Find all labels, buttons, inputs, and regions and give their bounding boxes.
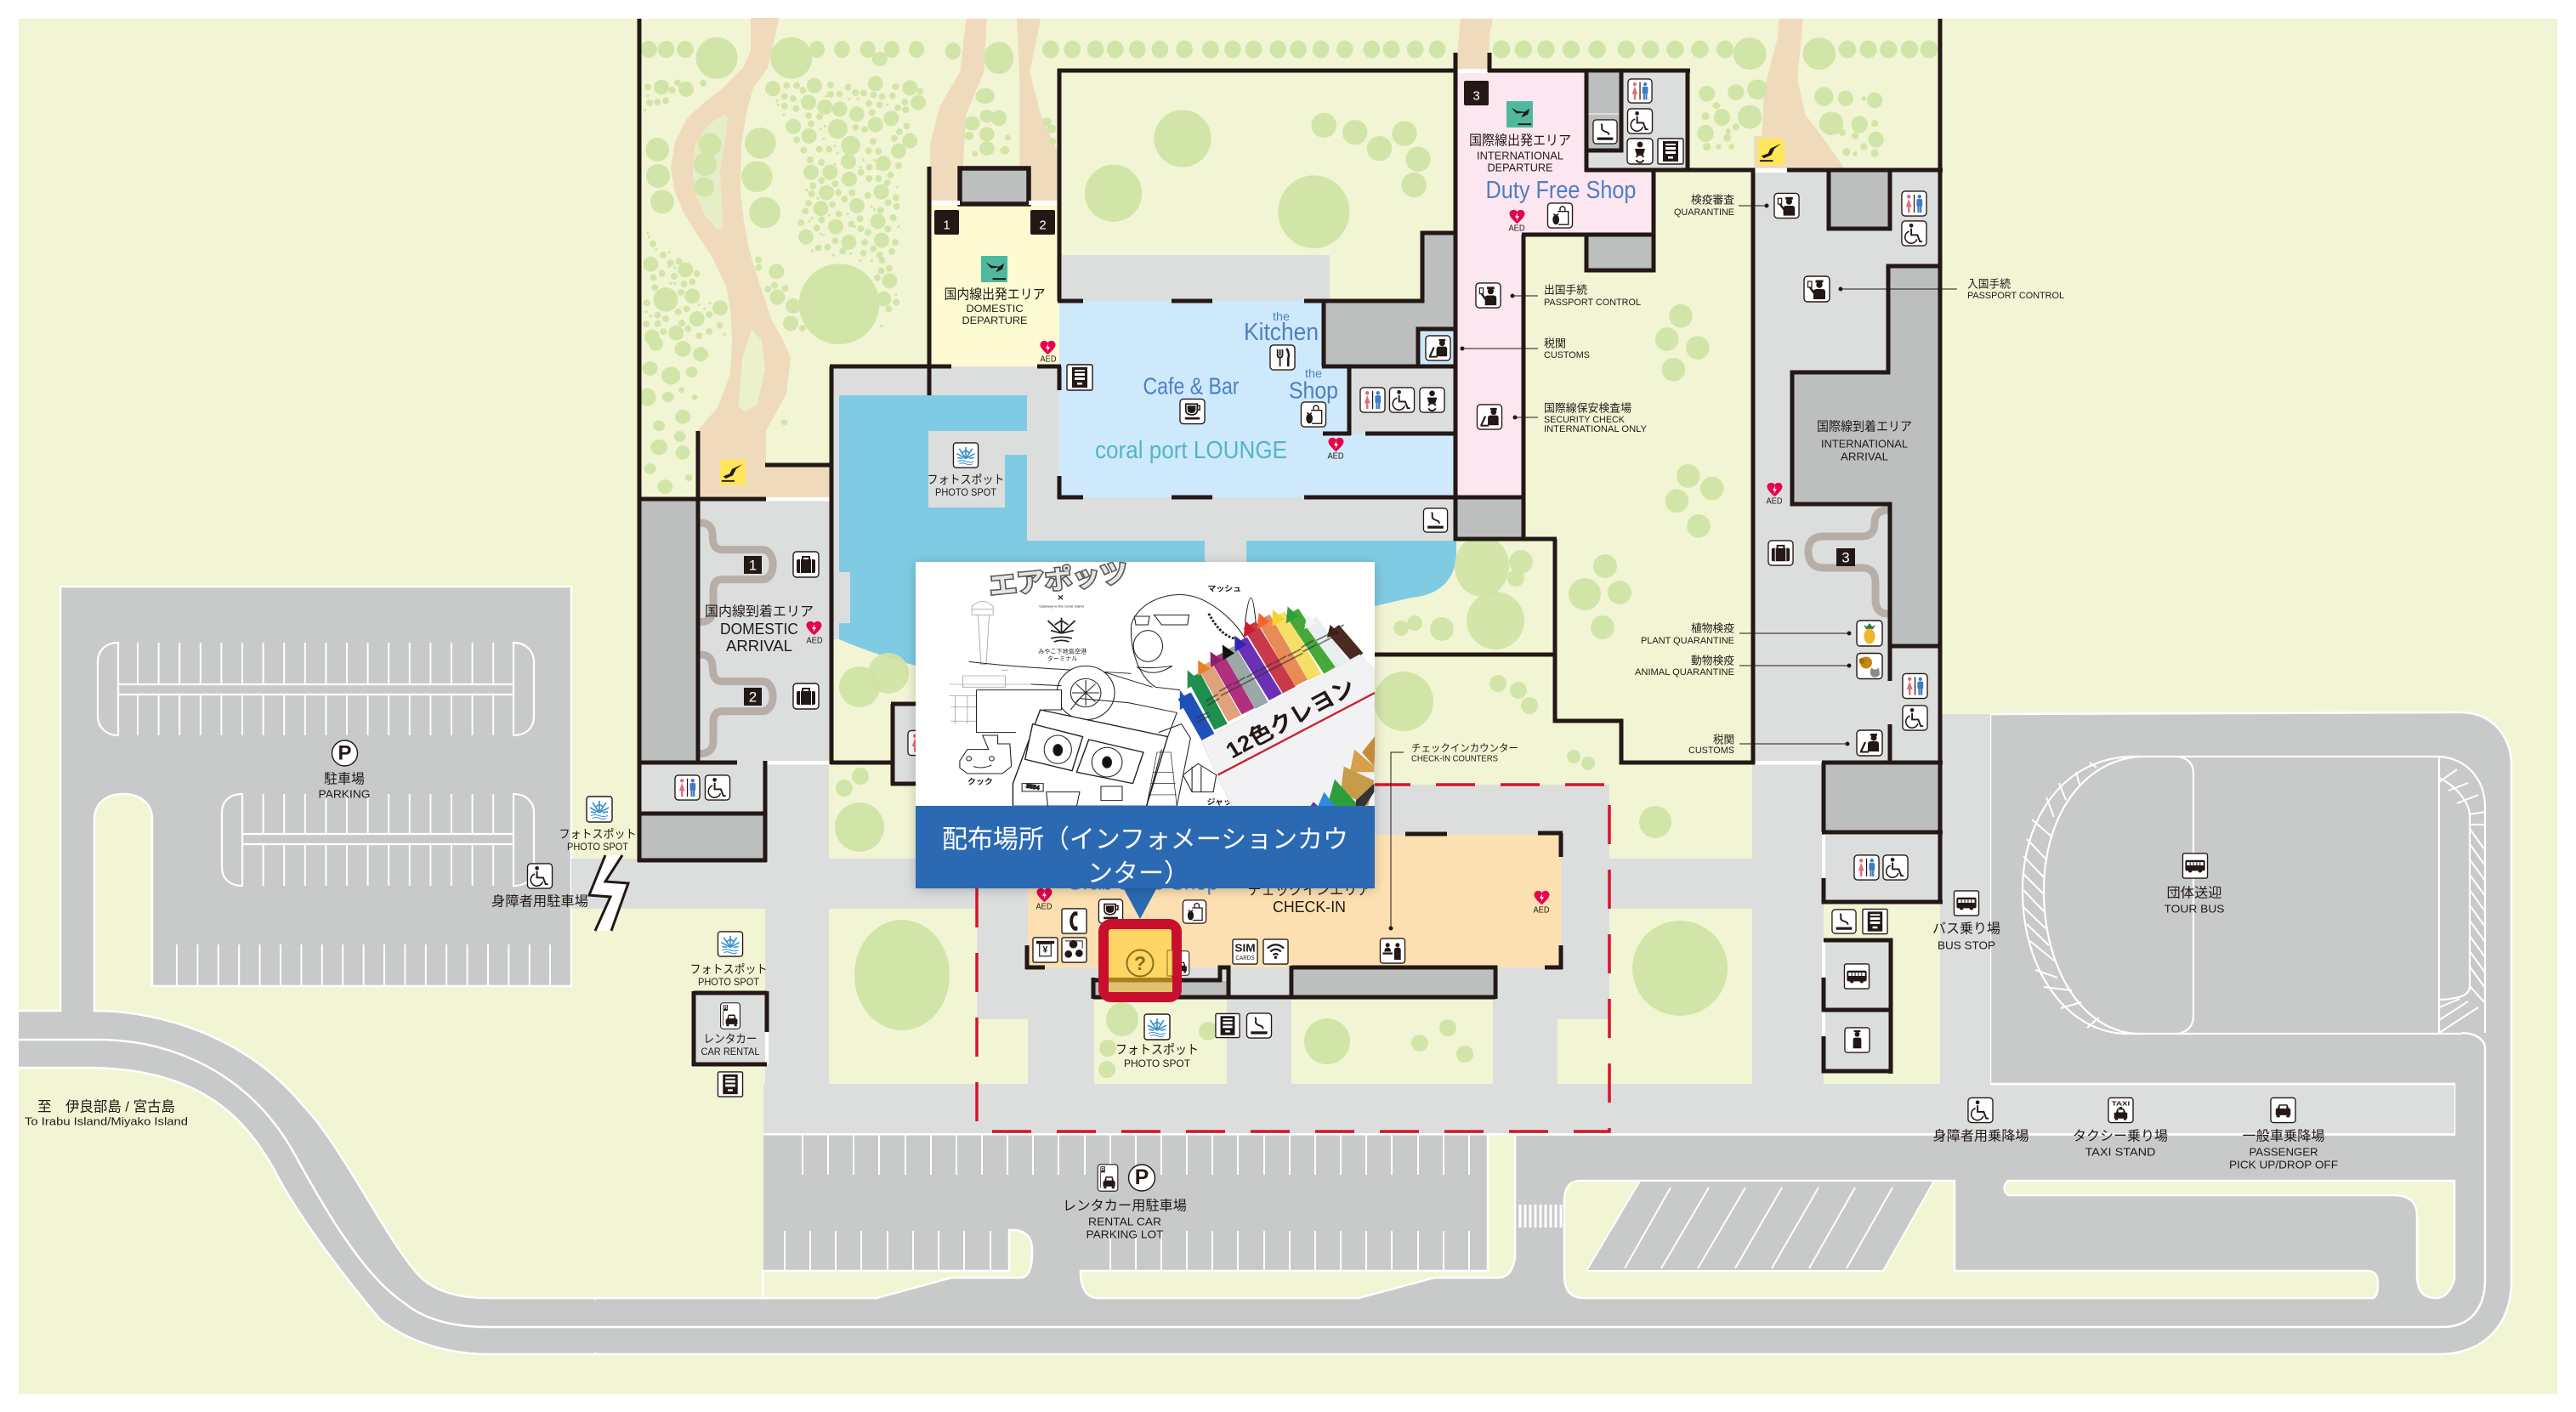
text: taxi stand: TAXI STAND	[2085, 1146, 2156, 1158]
panel: north-east facilities room	[1586, 71, 1688, 269]
text: tour bus	[2165, 886, 2225, 915]
text: security check: 国際線保安検査場	[1544, 401, 1631, 415]
text: to Irabu and Miyako	[25, 1098, 188, 1127]
group: AED markers: AED	[806, 636, 823, 646]
walkways	[571, 714, 2454, 1136]
text: bus stop	[1932, 921, 2000, 952]
text: south-west photo spot	[690, 962, 767, 988]
panel: north courtyard	[1059, 71, 1455, 301]
forecourt trees	[835, 554, 1728, 1078]
text: international arrival	[1817, 420, 1912, 462]
text: accessible drop off: 身障者用乗降場	[1933, 1129, 2028, 1144]
text: rental car parking lot: レンタカー用駐車場	[1063, 1199, 1187, 1214]
text: domestic departure: DEPARTURE	[962, 315, 1027, 326]
text: departure customs	[1544, 337, 1590, 360]
text: domestic arrival: 国内線到着エリア	[705, 604, 814, 619]
text: forecourt photo spot	[1115, 1042, 1199, 1069]
text: domestic departure	[944, 287, 1046, 326]
group: AED markers	[806, 210, 1782, 915]
panel: check-in hall	[1028, 835, 1561, 997]
text: tour bus: TOUR BUS	[2165, 903, 2225, 915]
text: domestic arrival	[705, 604, 814, 655]
green islands between roads	[763, 1134, 2454, 1298]
text: south-west photo spot: PHOTO SPOT	[698, 976, 760, 988]
callout image: colouring sheet and crayons: クック	[967, 778, 993, 786]
group: check-in hall icons	[1033, 899, 1405, 1040]
gate markers: 2	[1039, 218, 1047, 233]
text: coral port LOUNGE: coral port LOUNGE	[1095, 437, 1287, 464]
rental car parking bays	[763, 1134, 1488, 1298]
text: tour bus: 団体送迎	[2166, 886, 2222, 901]
text: car rental: レンタカー	[704, 1032, 757, 1046]
garden plots around terminal	[977, 1000, 1609, 1084]
group: AED markers: AED	[1508, 224, 1525, 233]
highlight: information counter	[1104, 924, 1177, 997]
text: accessible parking: 身障者用駐車場	[491, 894, 588, 910]
text: animal quarantine: 動物検疫	[1691, 655, 1734, 666]
text: Cafe and Bar: Cafe & Bar	[1143, 372, 1240, 400]
text: departure customs: CUSTOMS	[1544, 350, 1590, 360]
text: the Kitchen	[1244, 309, 1319, 346]
text: animal quarantine: ANIMAL QUARANTINE	[1635, 667, 1734, 678]
panel: small restroom block	[893, 704, 961, 784]
text: Duty Free Shop: Duty Free Shop	[1486, 177, 1636, 204]
text: departure passport control: PASSPORT CONTROL	[1544, 298, 1641, 308]
text: check-in counters: CHECK-IN COUNTERS	[1411, 755, 1498, 763]
text: parking: PARKING	[318, 787, 371, 801]
text: parking	[318, 772, 371, 801]
trees: upper west forest	[645, 82, 920, 344]
gate markers: 1	[943, 218, 950, 233]
text: to Irabu and Miyako: To Irabu Island/Miyako Island	[25, 1115, 188, 1127]
text: departure customs: 税関	[1544, 337, 1566, 350]
access road	[0, 1003, 850, 1354]
callout image: colouring sheet and crayons	[916, 558, 1376, 808]
text: international departure	[1469, 133, 1571, 173]
panel: dark service blocks	[639, 233, 1523, 860]
text: bus stop: BUS STOP	[1938, 938, 1995, 952]
group: AED markers: AED	[1041, 355, 1056, 364]
baggage carousel markers: 3	[1841, 549, 1850, 566]
text: pond photo spot	[927, 473, 1005, 498]
text: passenger pick up: PASSENGER	[2250, 1146, 2318, 1158]
overlapping trees at pond edge	[868, 536, 1533, 694]
panel: international departure area	[1456, 73, 1654, 497]
trees: top row and lower west forest	[638, 37, 1555, 494]
text: passenger pick up: PICK UP/DROP OFF	[2229, 1158, 2338, 1171]
text: check-in counters	[1411, 742, 1518, 763]
text: security check	[1544, 401, 1648, 434]
tan footpaths west	[672, 19, 1058, 497]
text: car rental	[701, 1032, 760, 1058]
text: arrival customs	[1688, 733, 1734, 756]
gate markers: 3	[1472, 88, 1480, 104]
panel: domestic arrival area	[639, 499, 831, 814]
panel: east building blocks	[1824, 763, 1940, 1071]
text: forecourt photo spot: フォトスポット	[1115, 1042, 1199, 1058]
callout image: colouring sheet and crayons: 12色クレヨン	[1222, 674, 1360, 763]
text: international arrival: INTERNATIONAL	[1821, 437, 1908, 451]
text: arrival customs: CUSTOMS	[1688, 746, 1734, 756]
text: bus stop: バス乗り場	[1932, 921, 2000, 937]
text: to Irabu and Miyako: 至 伊良部島 / 宮古島	[37, 1098, 175, 1115]
tan footpath east	[1456, 19, 1844, 168]
panel: international arrival area	[1753, 170, 1940, 763]
text: check-in area: CHECK-IN	[1273, 899, 1346, 916]
text: quarantine: QUARANTINE	[1674, 207, 1734, 218]
callout image: colouring sheet and crayons: Gateway to the Coral Island	[1039, 604, 1085, 608]
white door openings	[765, 69, 1825, 1064]
text: the Shop: the	[1305, 366, 1322, 380]
trees: east gardens	[1493, 37, 1938, 538]
road centre line	[19, 1033, 2485, 1327]
text: check-in counters: チェックインカウンター	[1411, 742, 1518, 754]
text: plant quarantine: PLANT QUARANTINE	[1641, 636, 1734, 646]
text: arrival passport control	[1967, 277, 2064, 301]
icon: international arrival sign	[1758, 139, 1784, 165]
text: plant quarantine	[1641, 622, 1734, 646]
text: quarantine	[1674, 194, 1734, 218]
text: domestic departure: DOMESTIC	[966, 303, 1024, 315]
text: parking: 駐車場	[324, 772, 365, 787]
text: check-in area: チェックインエリア	[1248, 882, 1370, 898]
text: west photo spot: フォトスポット	[559, 827, 636, 841]
text: international departure: 国際線出発エリア	[1469, 133, 1571, 148]
callout image: colouring sheet and crayons: ×	[1058, 593, 1064, 604]
text: the Shop	[1289, 366, 1338, 403]
text: departure passport control: 出国手続	[1544, 284, 1587, 296]
text: domestic arrival: ARRIVAL	[726, 638, 792, 655]
text: international departure: DEPARTURE	[1488, 162, 1553, 173]
icon: domestic departure sign	[981, 256, 1007, 282]
panel: car rental office	[694, 993, 767, 1064]
text: arrival passport control: PASSPORT CONTROL	[1967, 291, 2064, 301]
text: animal quarantine	[1635, 655, 1734, 678]
text: pond photo spot: フォトスポット	[927, 473, 1005, 486]
text: arrival passport control: 入国手続	[1967, 277, 2011, 291]
callout image: colouring sheet and crayons: 3554	[1025, 784, 1040, 791]
callout pointer	[1123, 887, 1157, 919]
text: passenger pick up	[2229, 1129, 2338, 1171]
baggage carousel markers: 1	[749, 558, 757, 573]
group: AED markers: AED	[1036, 903, 1053, 911]
text: the Kitchen: Kitchen	[1244, 319, 1319, 346]
text: taxi stand	[2073, 1129, 2168, 1158]
callout: distribution location	[916, 558, 1376, 888]
text: plant quarantine: 植物検疫	[1691, 622, 1734, 634]
text: Grab and Go Shop: Grab & Go Shop	[1067, 869, 1218, 894]
west parking lot	[60, 587, 571, 1011]
panel: coral port lounge	[1059, 301, 1456, 497]
building walls	[638, 19, 1943, 1074]
leader lines	[1389, 204, 1957, 930]
panel: domestic departure area	[929, 204, 1059, 366]
gate markers	[934, 81, 1489, 235]
icon: international departure sign	[1506, 101, 1533, 128]
highlight: information counter: ?	[1134, 952, 1146, 974]
callout image: colouring sheet and crayons: マッシュ	[1207, 585, 1241, 594]
callout caption bar: ンター）	[1087, 860, 1189, 887]
pond	[839, 395, 1456, 680]
callout caption bar: 配布場所（インフォメーションカウ	[942, 826, 1348, 853]
text: south-west photo spot: フォトスポット	[690, 962, 767, 976]
text: rental car parking lot	[1063, 1199, 1187, 1241]
text: rental car parking lot: PARKING LOT	[1087, 1228, 1164, 1241]
group: facility icons east	[1768, 191, 2295, 1123]
text: rental car parking lot: RENTAL CAR	[1088, 1216, 1161, 1228]
icon: domestic arrival sign	[720, 459, 746, 485]
text: check-in area	[1248, 882, 1370, 916]
road break symbol	[589, 855, 628, 931]
panel: gate box	[960, 168, 1029, 204]
baggage carousel markers	[744, 548, 1855, 706]
text: pond photo spot: PHOTO SPOT	[935, 486, 997, 498]
text: west photo spot: PHOTO SPOT	[567, 841, 629, 853]
callout image: colouring sheet and crayons: みやこ下地島空港	[1038, 648, 1087, 655]
pedestrian crossing	[1520, 1205, 1561, 1228]
baggage carousel markers: 2	[749, 689, 757, 706]
text: domestic departure: 国内線出発エリア	[944, 287, 1046, 303]
text: quarantine: 検疫審査	[1691, 194, 1734, 206]
tour bus forecourt and east road	[587, 712, 2511, 1354]
group: AED markers: AED	[1328, 452, 1343, 461]
group: facility icons north	[953, 79, 1683, 532]
text: taxi stand: タクシー乗り場	[2073, 1129, 2168, 1144]
callout image: colouring sheet and crayons: ジャッ	[1207, 798, 1232, 808]
text: arrival customs: 税関	[1713, 733, 1734, 746]
text: international departure: INTERNATIONAL	[1477, 150, 1563, 162]
group: AED markers: AED	[1534, 906, 1549, 915]
group: AED markers: AED	[1767, 496, 1782, 507]
text: security check: SECURITY CHECK	[1544, 415, 1626, 425]
text: international arrival: ARRIVAL	[1841, 451, 1888, 462]
diagonal parking bays	[1586, 1181, 1934, 1271]
text: the Kitchen: the	[1273, 309, 1290, 323]
text: domestic arrival: DOMESTIC	[720, 621, 798, 638]
text: car rental: CAR RENTAL	[701, 1046, 760, 1058]
panel: grey concourse around pond	[831, 366, 1456, 639]
group: facility icons west	[332, 552, 1155, 1191]
text: west photo spot	[559, 827, 636, 853]
text: departure passport control	[1544, 284, 1641, 308]
callout caption bar	[916, 806, 1375, 888]
text: international arrival: 国際線到着エリア	[1817, 420, 1912, 434]
text: passenger pick up: 一般車乗降場	[2243, 1129, 2324, 1144]
callout image: colouring sheet and crayons: ターミナル	[1047, 655, 1078, 662]
text: security check: INTERNATIONAL ONLY	[1544, 424, 1648, 434]
callout image: colouring sheet and crayons: エアポッツ	[987, 558, 1130, 601]
text: the Shop: Shop	[1289, 377, 1338, 403]
text: forecourt photo spot: PHOTO SPOT	[1124, 1058, 1191, 1069]
red dashed check-in boundary	[977, 785, 1609, 1131]
